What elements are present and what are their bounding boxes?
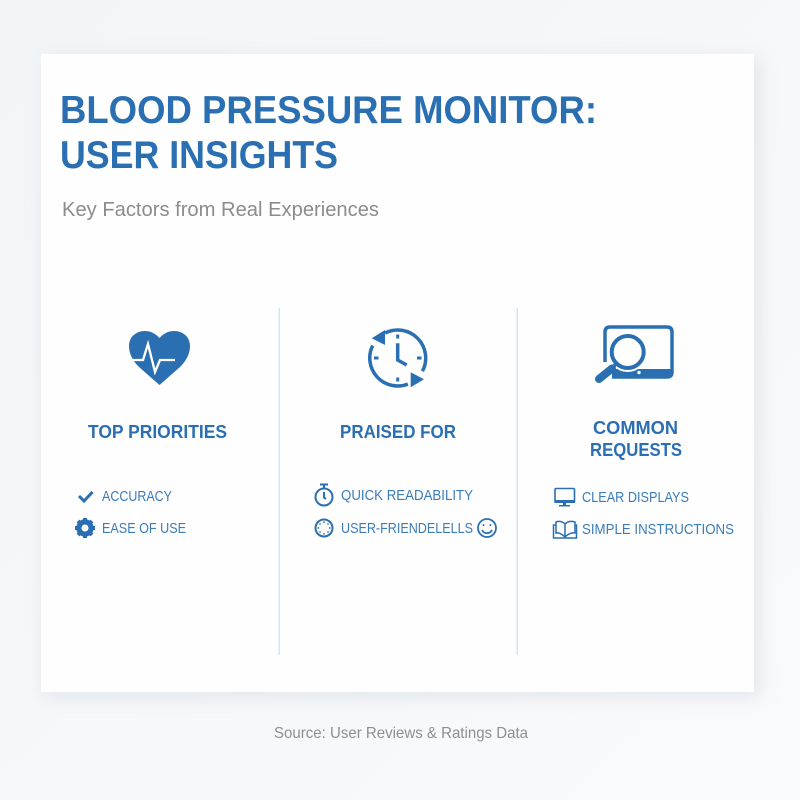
item: simple instructions: SIMPLE INSTRUCTIONS: [582, 521, 734, 538]
icon: smiley: [478, 519, 496, 537]
heading: common requests: REQUESTS: [590, 440, 682, 460]
item: quick readability: QUICK READABILITY: [341, 487, 473, 504]
subtitle: Key Factors from Real Experiences: [62, 199, 379, 221]
panel: common requests: [554, 327, 734, 538]
heading: common requests: COMMON: [593, 418, 678, 438]
heading: top priorities: TOP PRIORITIES: [88, 422, 227, 442]
icon: open book: [554, 521, 576, 538]
source note: Source: User Reviews & Ratings Data: [274, 725, 528, 742]
icon: clock with arrows: [370, 330, 426, 387]
icon: check mark: [79, 492, 92, 501]
icon: monitor: [554, 488, 575, 506]
title: BLOOD PRESSURE MONITOR:: [60, 89, 597, 132]
item: clear displays: CLEAR DISPLAYS: [582, 489, 689, 506]
item: user-friendly: USER-FRIENDELELLS: [341, 520, 473, 537]
icon: gear: [75, 518, 95, 538]
item: accuracy: ACCURACY: [102, 488, 172, 505]
heading: praised for: PRAISED FOR: [340, 422, 456, 442]
panel: top priorities: [75, 331, 227, 538]
icon: heart with pulse: [129, 331, 190, 385]
icon: dial: [316, 520, 332, 536]
panel: praised for: [316, 330, 496, 537]
heading: common requests: [590, 418, 682, 460]
icon: tablet with magnifier: [599, 327, 672, 379]
item: ease of use: EASE OF USE: [102, 520, 186, 537]
title: USER INSIGHTS: [60, 134, 338, 177]
title: [60, 89, 597, 177]
panel: main card: [41, 54, 754, 692]
icon: stopwatch: [316, 484, 332, 506]
